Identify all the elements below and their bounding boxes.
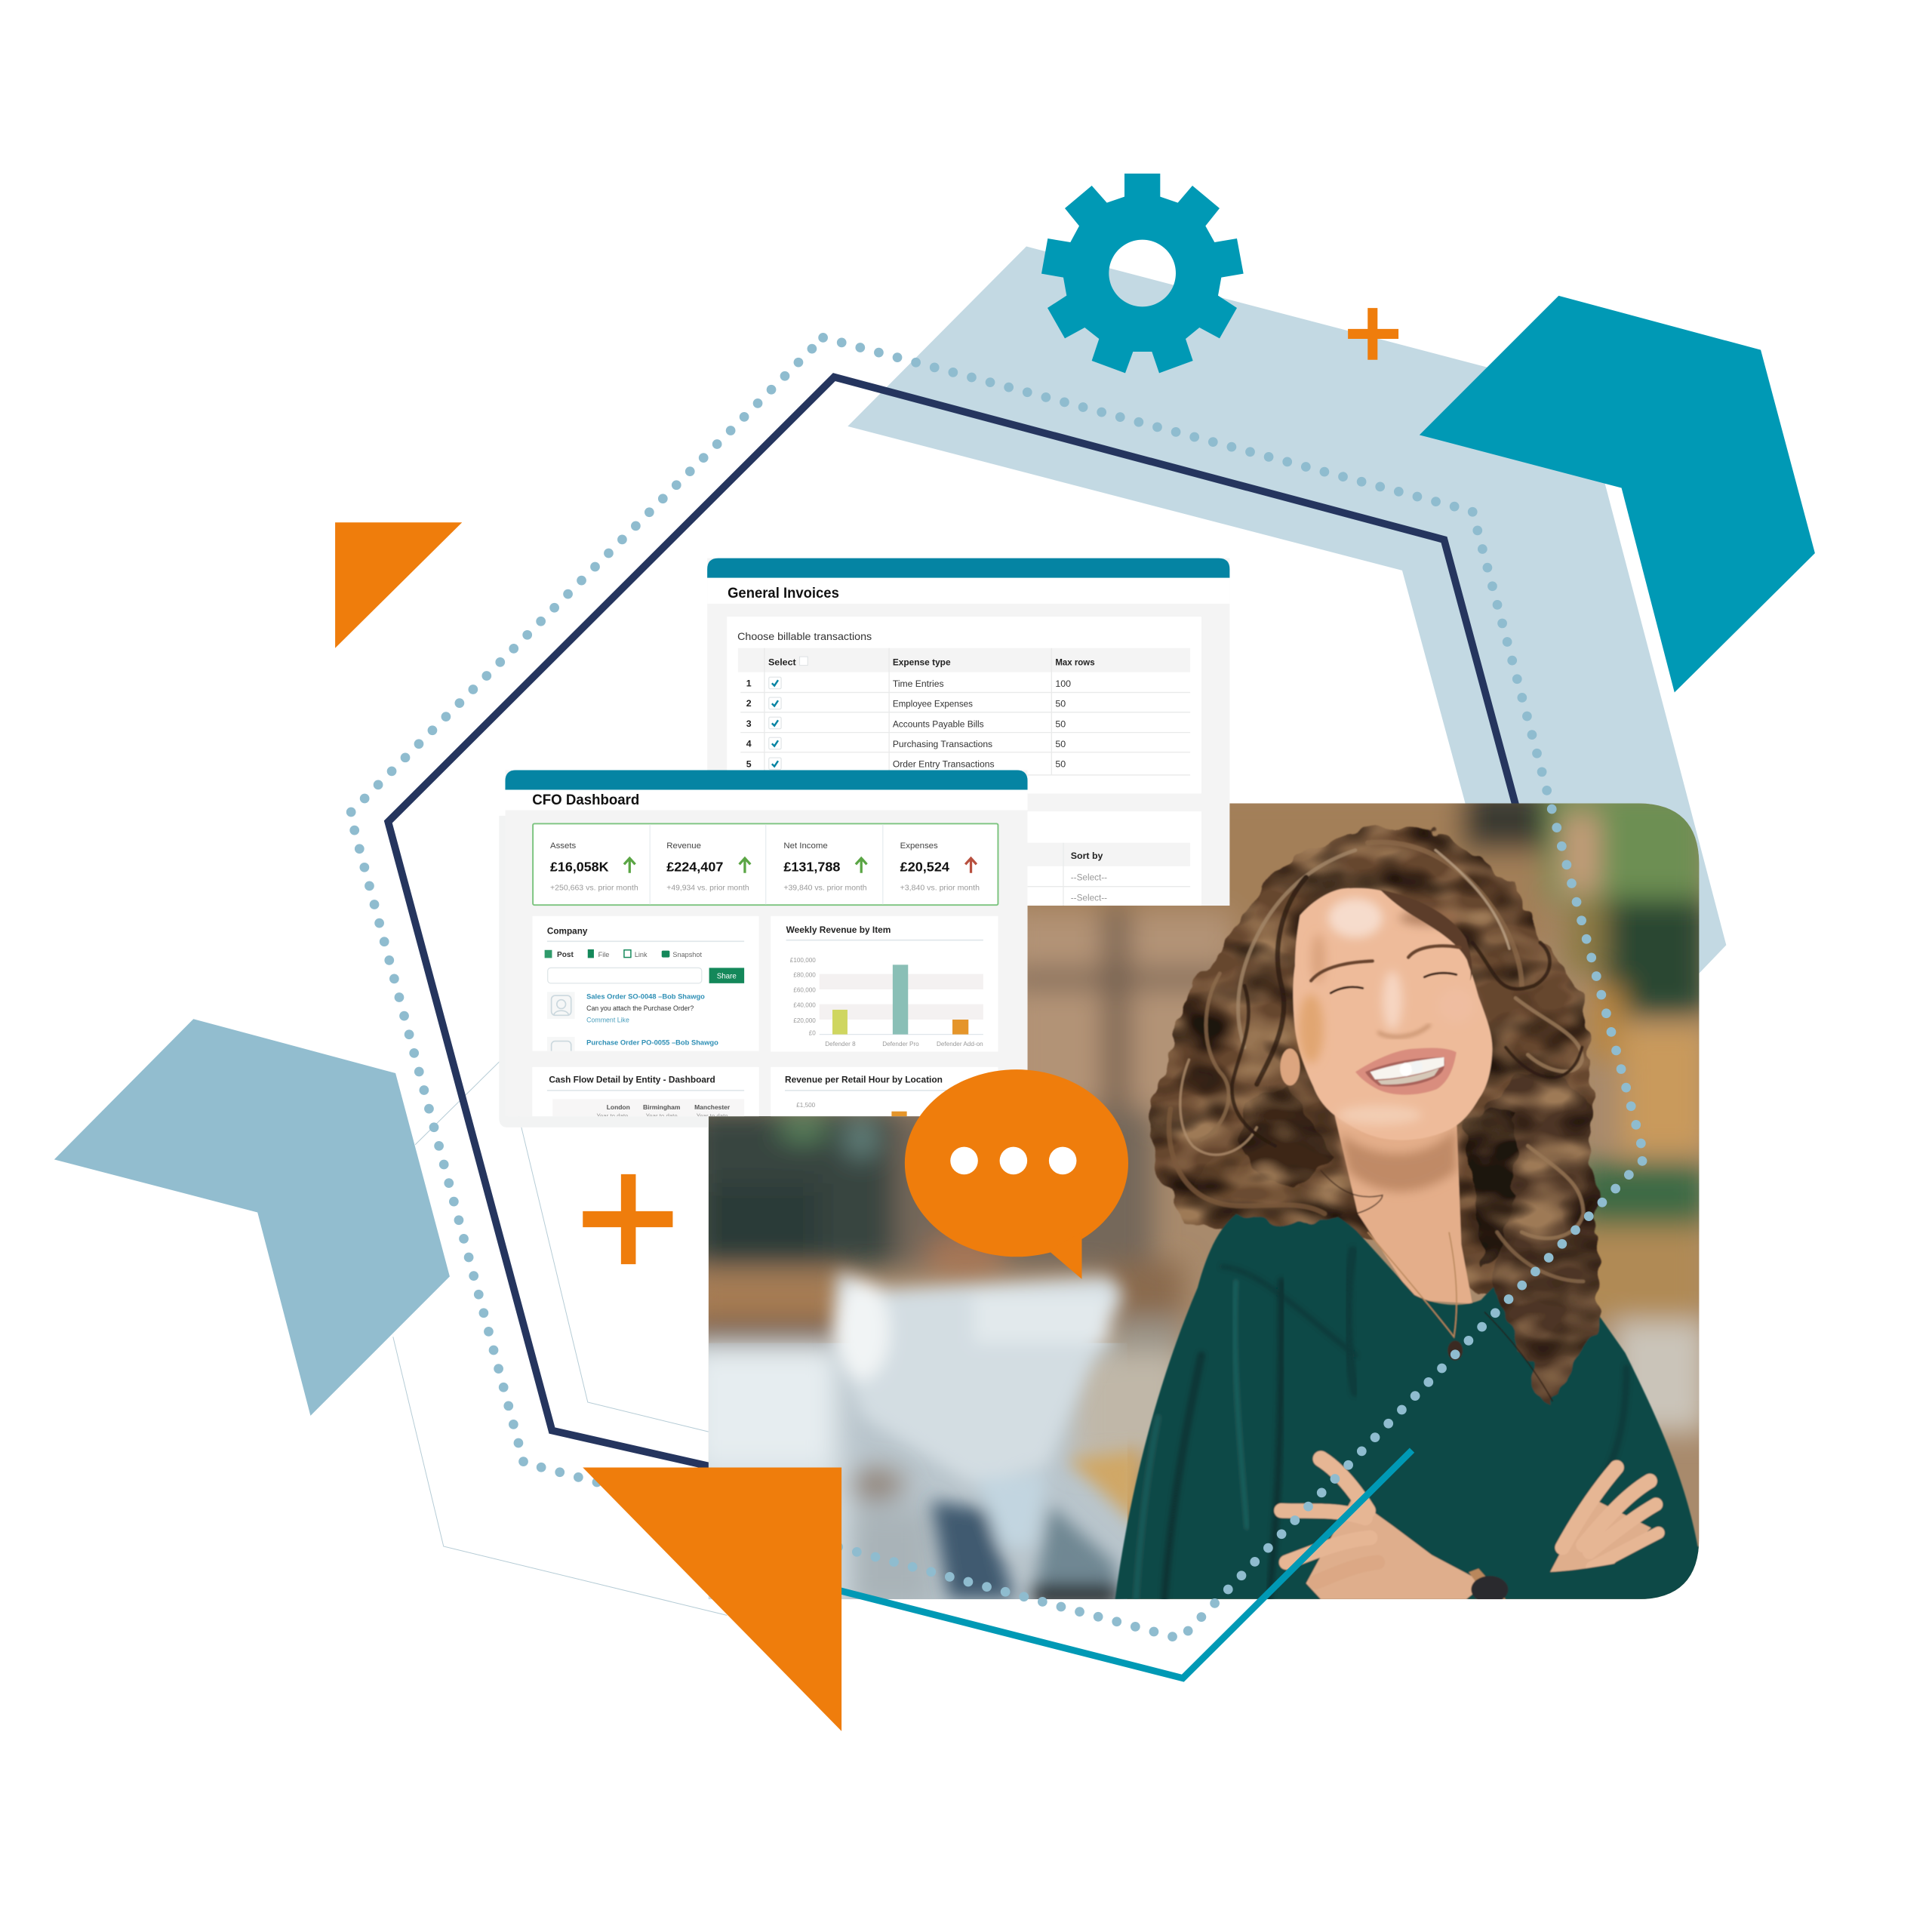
- panel: Company feed: Snapshot: [672, 951, 702, 958]
- table: billable transactions: 50: [1055, 739, 1066, 749]
- thin outline: lower left hexagon: [393, 1057, 727, 1615]
- panel: General Invoices screen: [707, 558, 1229, 906]
- woman: ear: [1280, 1048, 1300, 1085]
- panel: Weekly Revenue by Item chart: £80,000: [793, 972, 816, 979]
- woman: smile: [1355, 1048, 1457, 1095]
- icon: gear: [1041, 174, 1244, 373]
- panel: Weekly Revenue by Item chart: Defender Add-on: [937, 1041, 983, 1048]
- woman: hair strands: [1169, 842, 1583, 1401]
- chevron: teal upper right: [1420, 296, 1815, 693]
- icon: speech bubble: [905, 1069, 1128, 1279]
- panel: Company feed: Link: [635, 951, 648, 958]
- card header bar: [707, 558, 1229, 578]
- panel: Company feed: Company: [547, 927, 588, 937]
- panel: Company feed: File: [598, 951, 609, 958]
- table: billable transactions: 4: [746, 738, 752, 749]
- woman: hair back: [1151, 829, 1597, 1337]
- label: choose billable transactions: Choose billable transactions: [737, 630, 872, 642]
- woman: neck: [1334, 1109, 1472, 1303]
- plus: large orange: [583, 1174, 672, 1264]
- table: billable transactions: 50: [1055, 718, 1066, 729]
- table: billable transactions: Max rows: [1055, 657, 1095, 668]
- shadow: dashboard card underlay: [499, 816, 709, 1128]
- triangle: small orange: [335, 522, 462, 648]
- panel: Cash Flow Detail: Cash Flow Detail by Entity - Dashboard: [549, 1075, 715, 1084]
- KPI: net income: +39,840 vs. prior month: [783, 884, 867, 893]
- table: billable transactions: 3: [746, 718, 752, 729]
- woman: face: [1293, 888, 1492, 1140]
- dotted hexagon: [350, 337, 1645, 1638]
- panel: Cash Flow Detail: Year to date: [646, 1113, 678, 1120]
- table: billable transactions: Select: [768, 657, 796, 668]
- panel: Weekly Revenue by Item chart: £20,000: [793, 1017, 816, 1024]
- KPI strip: [533, 823, 998, 905]
- woman: hand right: [1550, 1467, 1659, 1572]
- table: billable transactions: 2: [746, 698, 752, 709]
- teal line: lower right: [826, 1451, 1412, 1678]
- KPI: net income: [783, 841, 867, 893]
- panel: Cash Flow Detail: Manchester: [694, 1103, 731, 1111]
- table: billable transactions: Expense type: [893, 657, 951, 668]
- KPI: revenue: +49,934 vs. prior month: [666, 884, 749, 893]
- table: billable transactions: 5: [746, 758, 752, 769]
- KPI: assets: Assets: [550, 841, 577, 851]
- hexagon line: navy: [388, 377, 1614, 1478]
- woman: eyes: [1331, 973, 1457, 993]
- panel: Company feed: Share: [717, 972, 737, 980]
- woman: front curls: [1177, 1076, 1599, 1404]
- table: billable transactions: Accounts Payable Bills: [893, 718, 984, 729]
- woman: face shading: [1299, 898, 1475, 1125]
- panel: Company feed: Can you attach the Purchase Order?: [586, 1004, 694, 1012]
- table: sort by options: --Select--: [1071, 893, 1107, 903]
- plus: small orange: [1348, 308, 1398, 360]
- KPI: assets: [550, 841, 638, 893]
- KPI: expenses: Expenses: [900, 841, 938, 851]
- table: billable transactions: 100: [1055, 678, 1071, 689]
- table: sort by options: [740, 843, 1190, 906]
- panel: Weekly Revenue by Item chart: £60,000: [793, 986, 816, 993]
- table: billable transactions: Purchasing Transactions: [893, 739, 992, 749]
- panel: Company feed: Purchase Order PO-0055 –Bob Shawgo: [586, 1038, 718, 1047]
- woman: nose: [1379, 1025, 1429, 1037]
- table: billable transactions: [738, 648, 1190, 775]
- KPI: revenue: [666, 841, 750, 893]
- table: sort by options: Sort by: [1071, 851, 1103, 861]
- KPI: net income: £131,788: [783, 859, 840, 874]
- panel: Cash Flow Detail: Year to date: [596, 1113, 628, 1120]
- panel: Weekly Revenue by Item chart: Defender 8: [825, 1041, 856, 1048]
- table: billable transactions: 50: [1055, 758, 1066, 769]
- panel: Company feed: Post: [557, 951, 574, 959]
- KPI: expenses: £20,524: [900, 859, 949, 874]
- table: billable transactions: Employee Expenses: [893, 698, 973, 709]
- table: billable transactions: 50: [1055, 698, 1066, 709]
- panel: Weekly Revenue by Item chart: Weekly Revenue by Item: [786, 925, 891, 935]
- panel: Weekly Revenue by Item chart: £0: [809, 1029, 816, 1036]
- photo background: blurred cafe colours: [690, 789, 1708, 1614]
- woman: figure: [1115, 829, 1699, 1603]
- woman: wrist watch: [1469, 1568, 1508, 1603]
- KPI: expenses: +3,840 vs. prior month: [900, 884, 980, 893]
- panel: Company feed: Comment Like: [586, 1016, 629, 1023]
- KPI: assets: £16,058K: [550, 859, 609, 874]
- woman: blouse cuff: [1466, 1546, 1699, 1599]
- panel: Revenue per Retail Hour: Revenue per Retail Hour by Location: [785, 1075, 943, 1084]
- woman: forelock: [1380, 890, 1472, 981]
- panel: CFO Dashboard screen: [505, 770, 1028, 1122]
- table: billable transactions: 1: [746, 678, 752, 688]
- panel: Cash Flow Detail: London: [607, 1103, 630, 1111]
- panel: Company feed: Sales Order SO-0048 –Bob Shawgo: [586, 992, 705, 1001]
- panel: Revenue per Retail Hour: [771, 1067, 998, 1122]
- KPI: net income: Net Income: [783, 841, 828, 851]
- panel: Weekly Revenue by Item chart: £40,000: [793, 1002, 816, 1009]
- panel: Weekly Revenue by Item chart: £100,000: [790, 957, 816, 964]
- panel: Weekly Revenue by Item chart: Defender Pro: [882, 1041, 919, 1048]
- heading: General Invoices: General Invoices: [728, 585, 839, 601]
- KPI: revenue: £224,407: [666, 859, 723, 874]
- KPI: assets: +250,663 vs. prior month: [550, 884, 638, 893]
- photo: smiling woman with blurred cafe background: [690, 789, 1708, 1614]
- panel: Cash Flow Detail: [532, 1067, 759, 1122]
- KPI: revenue: Revenue: [666, 841, 701, 851]
- triangle: large orange: [583, 1467, 841, 1731]
- panel: Cash Flow Detail: Birmingham: [643, 1103, 680, 1111]
- background band: light blue hexagon ring: [848, 247, 1726, 1232]
- panel: Revenue per Retail Hour: £1,500: [796, 1102, 816, 1109]
- heading: CFO Dashboard: CFO Dashboard: [532, 792, 639, 808]
- table: billable transactions: Time Entries: [893, 678, 944, 689]
- table: sort by options: --Select--: [1071, 873, 1107, 883]
- table: billable transactions: Order Entry Transactions: [893, 758, 995, 769]
- woman: eyebrows: [1311, 946, 1460, 981]
- woman: necklace: [1367, 1232, 1463, 1360]
- panel: Cash Flow Detail: Year to date: [697, 1113, 728, 1120]
- KPI: expenses: [900, 841, 980, 893]
- woman: hand left: [1281, 1459, 1481, 1599]
- panel: Weekly Revenue by Item chart: [771, 916, 998, 1051]
- panel: Company feed: [532, 916, 759, 1061]
- card header bar: [505, 770, 1028, 790]
- woman: blouse: [1115, 1203, 1699, 1599]
- chevron: light blue left: [54, 1019, 450, 1416]
